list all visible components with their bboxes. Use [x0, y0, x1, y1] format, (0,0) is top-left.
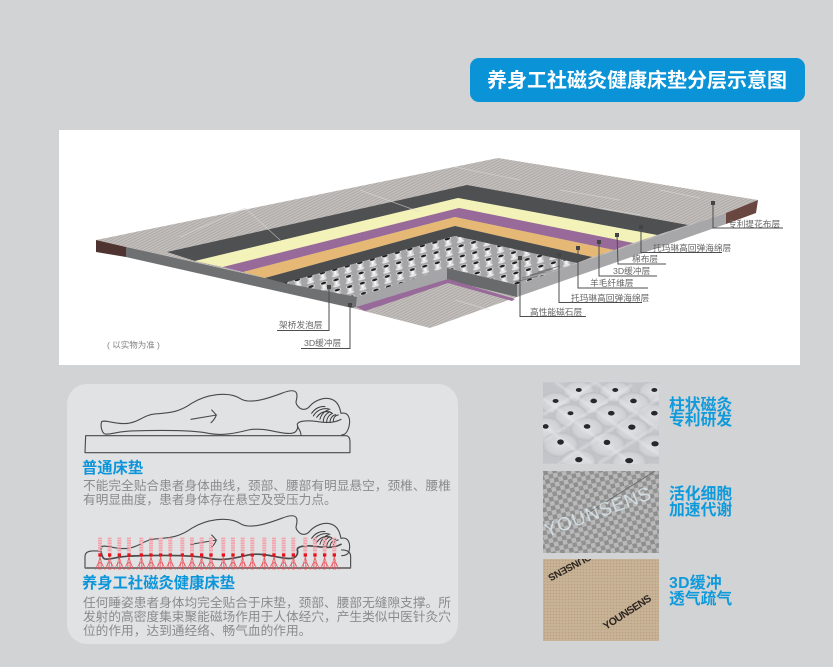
label: tourmaline foam upper — [639, 225, 732, 253]
label: cotton layer — [615, 233, 666, 264]
brown end right — [726, 200, 758, 224]
layer: purple — [223, 208, 633, 272]
text: brand mattress description: 发射的高密度集束聚能磁场作用于人体经穴，产生类似中医针灸穴 — [83, 609, 451, 624]
caption: columnar magnets — [669, 396, 732, 429]
illustration: magnetic moxibustion mattress — [85, 516, 351, 570]
caption: 3D mesh: 透气疏气 — [669, 589, 732, 608]
caption: columnar magnets: 专利研发 — [669, 410, 732, 429]
label: magnet layer — [518, 256, 586, 317]
purple lower strip — [356, 279, 515, 311]
photo: fabric weave — [542, 471, 659, 553]
label: wool fibre layer — [576, 246, 648, 288]
heading: ordinary mattress: 普通床垫 — [82, 459, 144, 477]
label: 3D cushion upper — [597, 240, 657, 276]
photo: 3D mesh: YOUNSENS — [546, 547, 599, 583]
cut face light grey — [356, 268, 448, 307]
illustration: ordinary mattress — [85, 391, 350, 453]
label: wool fibre layer: 羊毛纤维层 — [590, 277, 634, 288]
caption: fabric weave — [669, 484, 732, 519]
label: patent jacquard layer — [711, 201, 783, 229]
label: 3D cushion lower — [301, 303, 352, 348]
layer: cotton yellow — [195, 198, 657, 267]
cut face dark — [447, 268, 517, 297]
text: ordinary mattress description — [83, 478, 451, 507]
label: magnet layer: 高性能磁石层 — [530, 306, 582, 317]
label: bridge foam layer — [277, 285, 331, 330]
caption: fabric weave: 活化细胞 — [669, 484, 732, 503]
hatch marks — [515, 266, 560, 282]
layer: top dark foam — [167, 185, 688, 261]
photo: fabric weave: YOUNSENS — [542, 484, 654, 542]
magnetic field marks — [95, 538, 339, 570]
label: 3D cushion lower: 3D缓冲层 — [304, 337, 341, 348]
text: ordinary mattress description: 不能完全贴合患者身体曲线，颈部、腰部有明显悬空，颈椎、腰椎 — [83, 478, 451, 493]
label: 3D cushion upper: 3D缓冲层 — [613, 265, 650, 276]
layer: orange wool — [243, 217, 614, 278]
label: tourmaline foam lower: 托玛琳高回弹海绵层 — [571, 292, 650, 303]
caption: 3D mesh: 3D缓冲 — [669, 573, 722, 592]
layer: lower dark foam — [265, 226, 592, 283]
label: patent jacquard layer: 专利提花布层 — [728, 218, 780, 229]
front grey side — [126, 247, 357, 308]
label: tourmaline foam upper: 托玛琳高回弹海绵层 — [653, 242, 732, 253]
caption: fabric weave: 加速代谢 — [669, 501, 732, 519]
magnet hole layer — [284, 236, 577, 297]
text: brand mattress description: 位的作用，达到通经络、畅气血的作用。 — [83, 623, 311, 638]
right grey side — [517, 213, 726, 297]
fabric highlights — [180, 167, 700, 310]
note: subject to actual product: ( 以实物为准 ) — [107, 340, 160, 350]
text: brand mattress description: 任何睡姿患者身体均完全贴合于床垫，颈部、腰部无缝隙支撑。所 — [83, 595, 451, 610]
panel: mattress layer diagram — [59, 130, 800, 365]
label: tourmaline foam lower — [557, 253, 650, 303]
brown end left — [96, 240, 126, 257]
label: cotton layer: 棉布层 — [632, 253, 658, 264]
title banner — [470, 58, 805, 102]
label: bridge foam layer: 架桥发泡层 — [279, 319, 323, 330]
heading: brand mattress: 养身工社磁灸健康床垫 — [82, 574, 236, 592]
caption: 3D mesh — [669, 573, 732, 608]
photo: 3D mesh: YOUNSENS — [601, 592, 654, 633]
photo: 3D mesh — [543, 547, 659, 641]
panel: mattress comparison — [67, 384, 458, 644]
mattress top fabric — [96, 158, 758, 328]
caption: columnar magnets: 柱状磁灸 — [669, 396, 732, 414]
text: ordinary mattress description: 有明显曲度，患者身体存在悬空及受压力点。 — [83, 492, 337, 507]
title banner: 养身工社磁灸健康床垫分层示意图 — [487, 68, 787, 92]
text: brand mattress description — [83, 595, 451, 638]
photo: columnar magnets — [528, 380, 674, 476]
